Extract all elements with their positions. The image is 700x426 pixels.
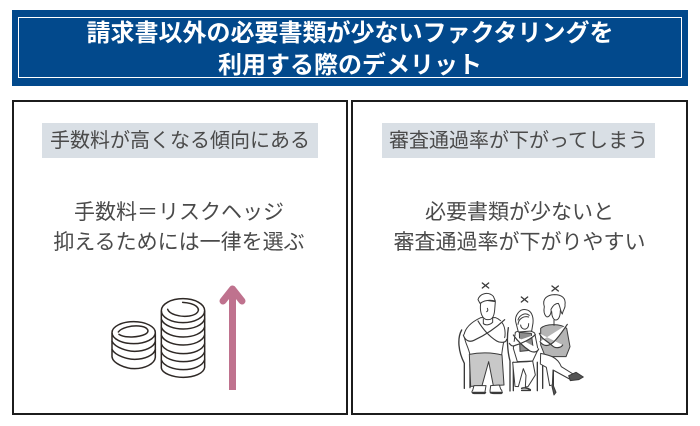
heading: harder screening <box>382 123 655 158</box>
x marks <box>482 283 558 302</box>
text block: fee explanation: 抑えるためには一律を選ぶ <box>53 231 305 254</box>
text block: screening explanation: 審査通過率が下がりやすい <box>394 231 646 254</box>
title frame and text: 利用する際のデメリット <box>218 52 482 79</box>
text block: screening explanation: 必要書類が少ないと <box>425 201 614 224</box>
heading: harder screening: 審査通過率が下がってしまう <box>389 130 648 152</box>
icon: three people crossing arms <box>458 282 584 396</box>
heading: high fees <box>42 123 318 158</box>
middle woman <box>509 310 539 390</box>
right woman <box>539 295 583 395</box>
left man <box>463 293 507 394</box>
title frame and text <box>18 17 682 78</box>
arrow: rising fees <box>220 286 246 390</box>
title frame and text: 請求書以外の必要書類が少ないファクタリングを <box>86 20 614 47</box>
chairs <box>459 328 553 391</box>
panel: high fees <box>12 100 348 415</box>
title banner <box>12 10 688 86</box>
text block: fee explanation: 手数料＝リスクヘッジ <box>74 201 284 224</box>
text block: fee explanation <box>53 201 305 254</box>
icon: coin stacks <box>111 298 206 378</box>
panel: harder screening <box>351 100 688 415</box>
heading: high fees: 手数料が高くなる傾向にある <box>50 130 310 152</box>
text block: screening explanation <box>394 201 646 254</box>
